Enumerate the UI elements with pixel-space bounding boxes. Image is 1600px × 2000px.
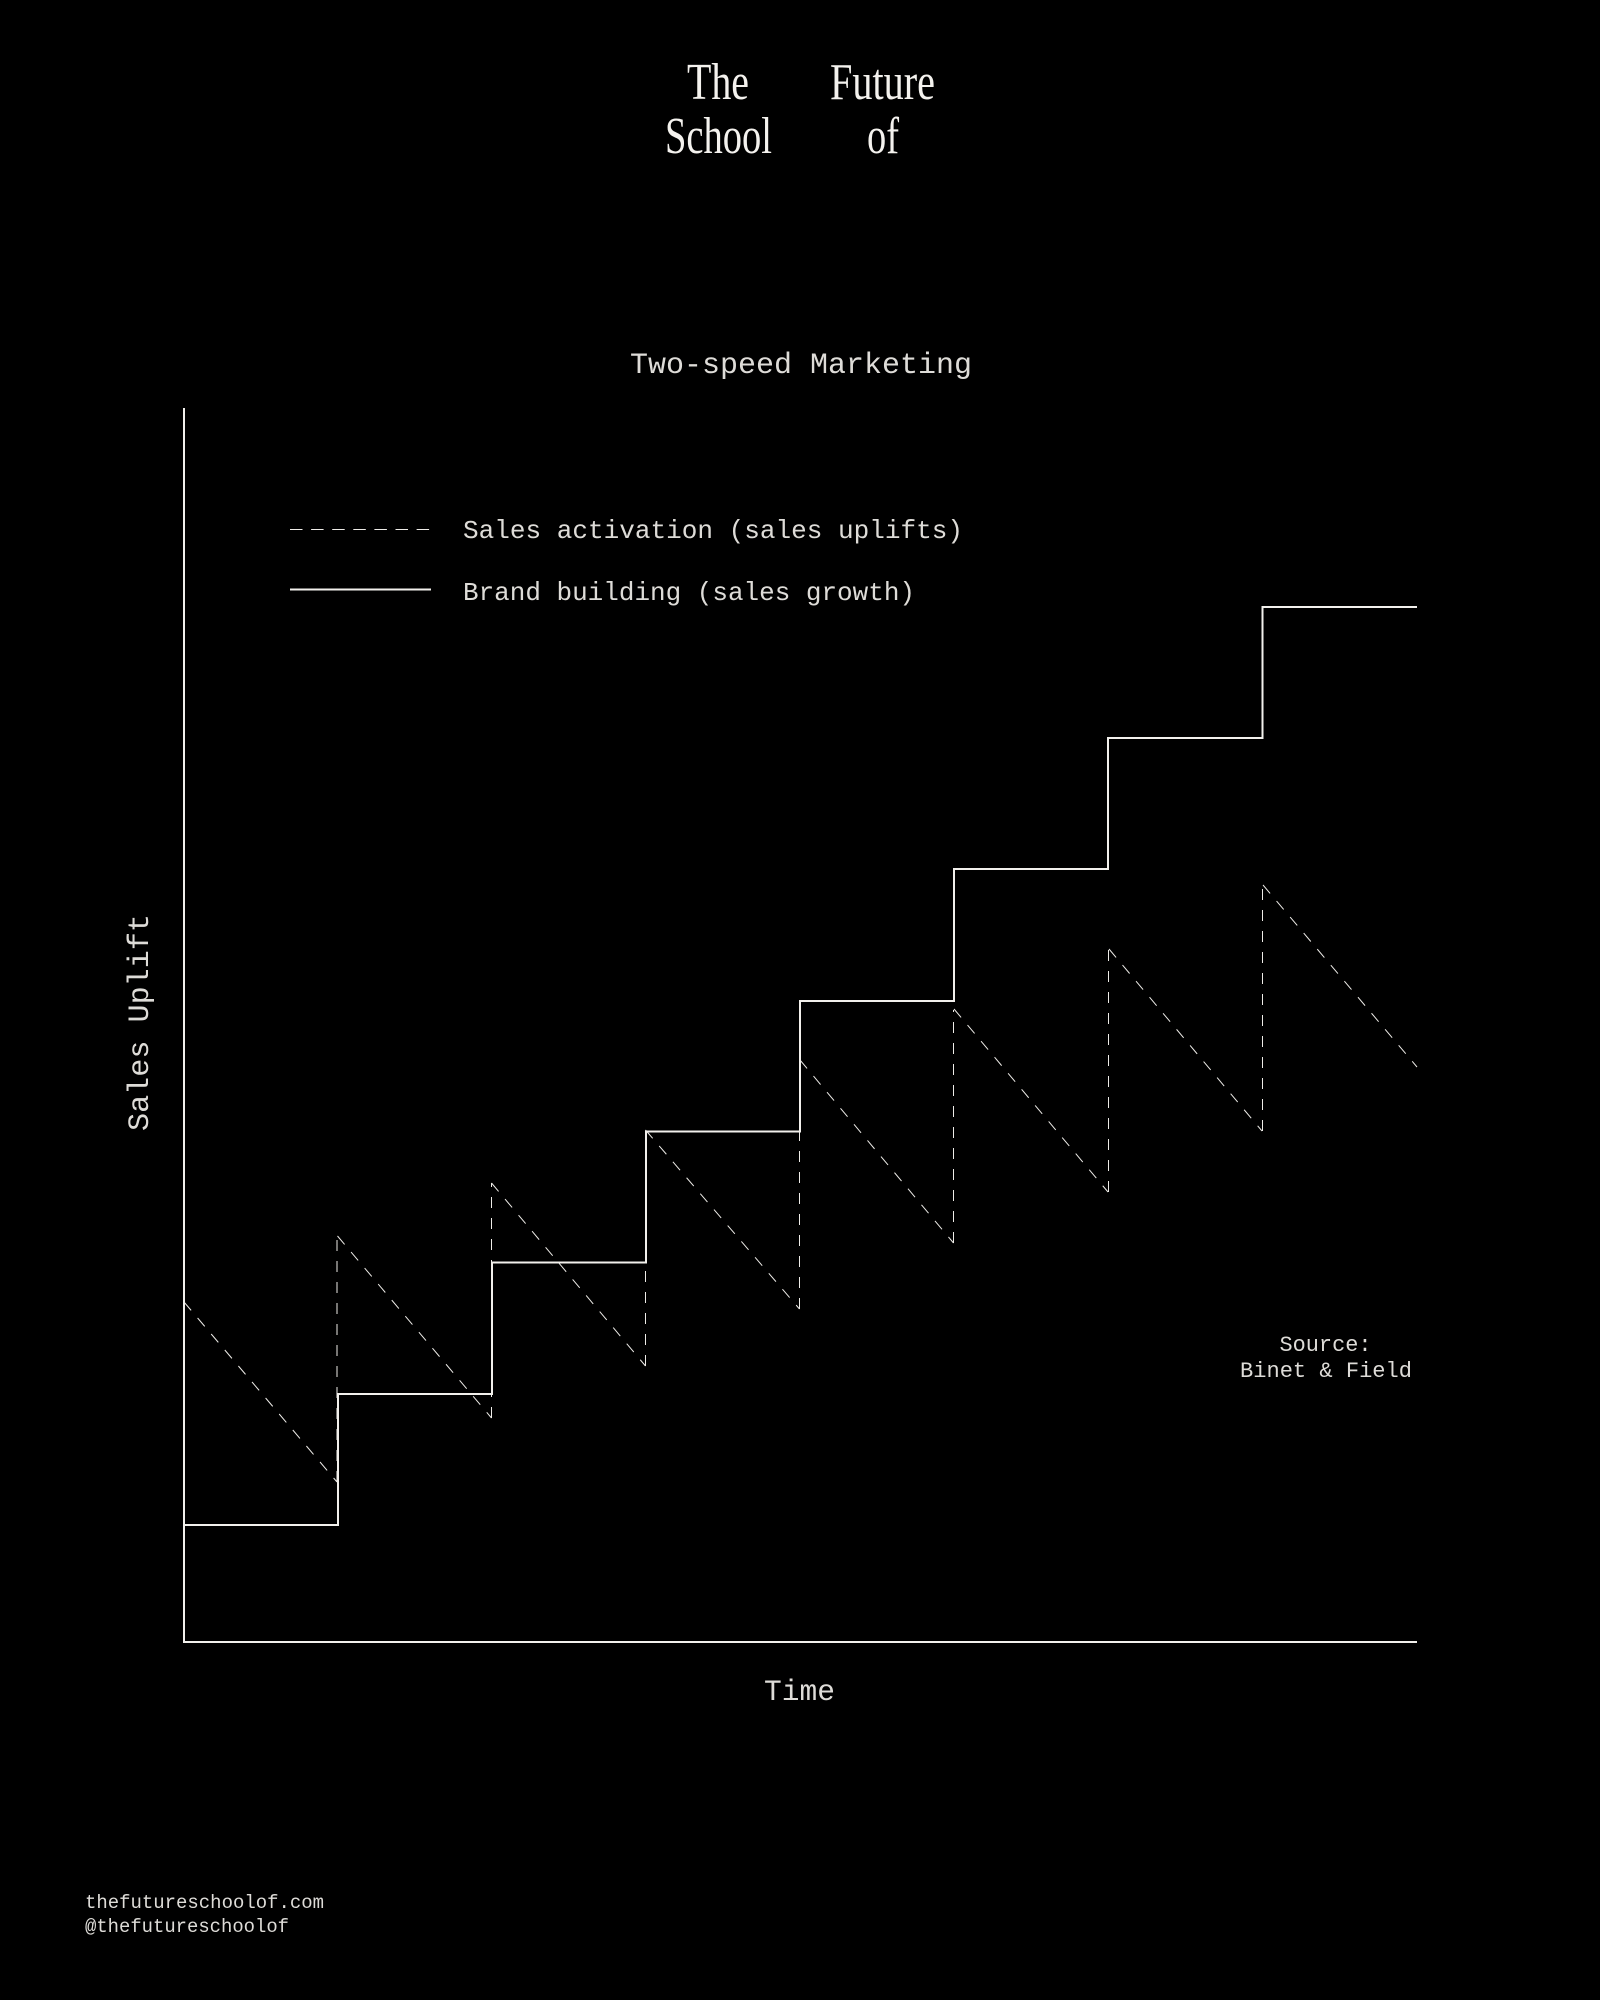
x axis label: Time — [764, 1676, 835, 1710]
title: The School of Future logo: Future — [830, 54, 935, 111]
axes — [184, 408, 1417, 1642]
legend — [290, 516, 963, 608]
source note: Binet & Field — [1240, 1359, 1412, 1384]
title: The School of Future logo: of — [867, 108, 899, 165]
footer: website and handle: @thefutureschoolof — [85, 1916, 289, 1938]
title: The School of Future logo: School — [665, 108, 772, 165]
sales activation dashed sawtooth line — [184, 885, 1417, 1482]
source note: Source: — [1280, 1333, 1372, 1358]
title: The School of Future logo — [665, 54, 935, 165]
legend item: sales activation: Sales activation (sales uplifts) — [463, 516, 963, 546]
legend item: brand building: Brand building (sales growth) — [463, 578, 915, 608]
heading: chart title: Two-speed Marketing — [630, 349, 972, 383]
brand building solid step line — [184, 607, 1417, 1525]
title: The School of Future logo: The — [687, 54, 749, 111]
chart: two-speed marketing line chart — [184, 408, 1417, 1642]
footer: website and handle — [85, 1892, 324, 1938]
footer: website and handle: thefutureschoolof.com — [85, 1892, 324, 1914]
y axis label: Sales Uplift — [124, 914, 158, 1131]
source note — [1240, 1333, 1412, 1384]
